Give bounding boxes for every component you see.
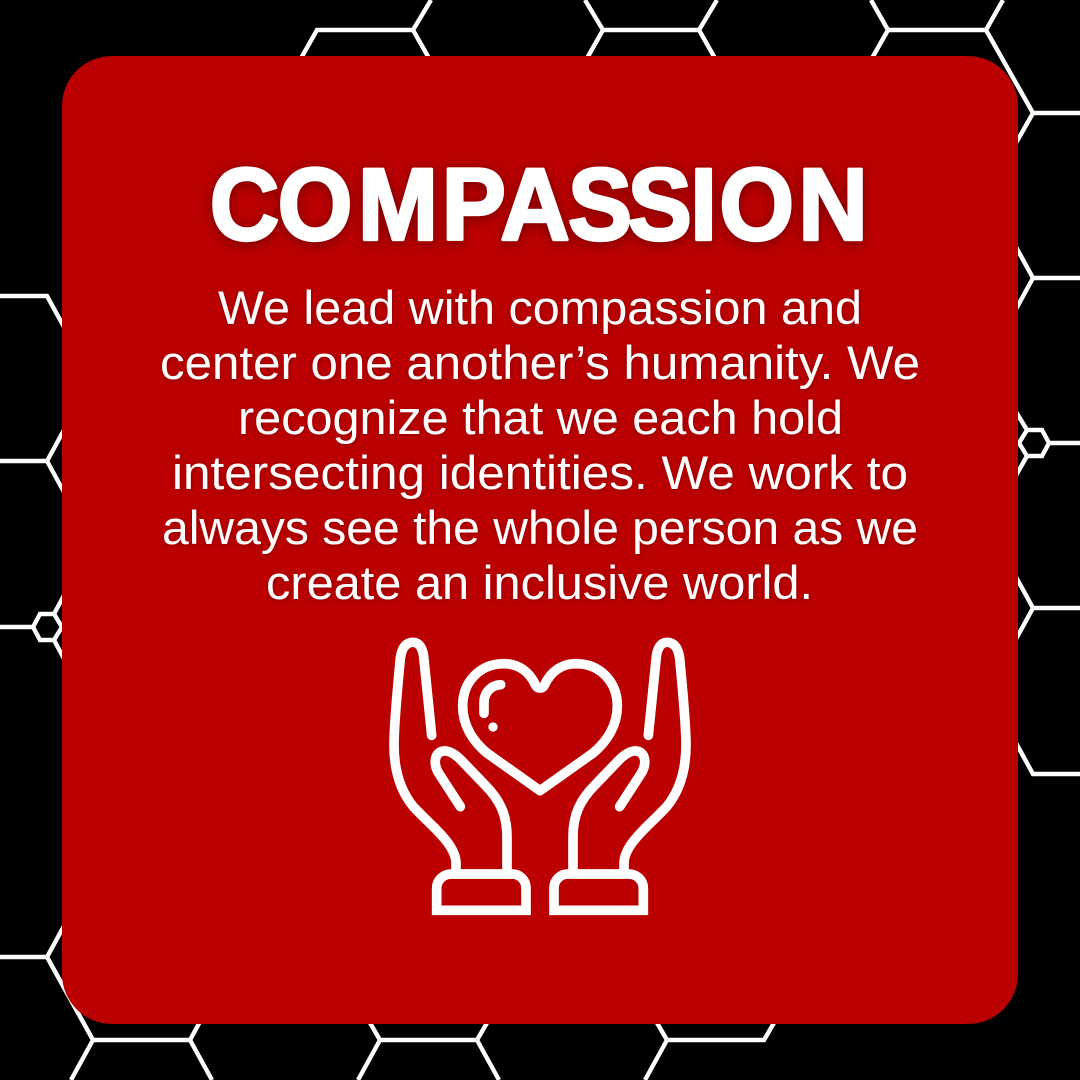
body text block: intersecting identities. We work to bbox=[172, 446, 908, 499]
icon part: right hand bbox=[573, 642, 686, 874]
body text block: We lead with compassion and bbox=[218, 281, 862, 334]
icon: hands holding heart bbox=[394, 642, 686, 910]
body text block: center one another’s humanity. We bbox=[160, 336, 920, 389]
icon part: heart highlight dot bbox=[488, 722, 498, 732]
body text block: always see the whole person as we bbox=[162, 501, 918, 554]
body text block: recognize that we each hold bbox=[238, 391, 843, 444]
icon part: right cuff bbox=[554, 874, 643, 910]
heading: COMPASSION: COMPASSION bbox=[210, 147, 868, 261]
icon part: heart bbox=[463, 664, 617, 791]
icon part: left cuff bbox=[437, 874, 526, 910]
icon part: heart highlight bbox=[484, 685, 501, 713]
body text block: create an inclusive world. bbox=[266, 556, 813, 609]
icon part: left hand bbox=[394, 642, 507, 874]
panel: red card bbox=[62, 56, 1018, 1024]
body text block bbox=[160, 281, 920, 609]
